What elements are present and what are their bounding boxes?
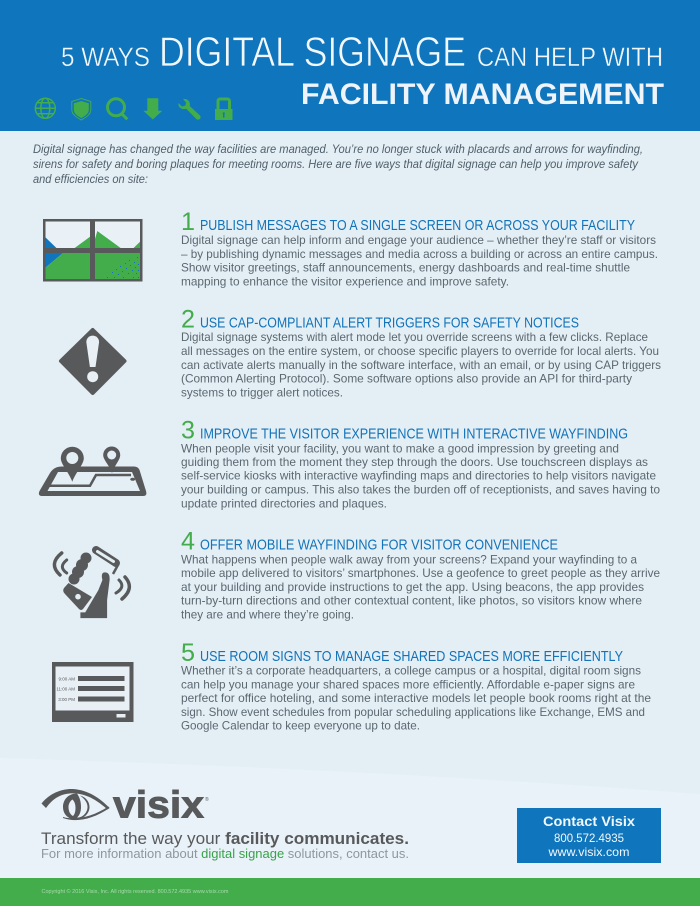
- registered mark: ®: [205, 796, 209, 803]
- body 3: your building or campus. This also takes the burden off of receptionists, and saves having to: [181, 482, 660, 496]
- icon: room sign schedule: 3:00 PM: [58, 697, 75, 702]
- body 4: [181, 552, 660, 621]
- title line 2: FACILITY MANAGEMENT: [301, 78, 664, 111]
- body 2: can activate alerts manually in the software interface, with an email, or by using CAP triggers: [181, 358, 661, 372]
- body 5: [181, 664, 651, 733]
- icon: phone in hand with signal waves: [54, 550, 129, 618]
- visix logo: [42, 784, 209, 826]
- header icons: [35, 98, 232, 120]
- logo eye: [42, 789, 110, 820]
- title line 1: DIGITAL SIGNAGE: [159, 28, 466, 75]
- intro text: and efficiencies on site:: [33, 172, 148, 186]
- copyright: Copyright © 2016 Visix, Inc. All rights reserved. 800.572.4935 www.visix.com: [42, 888, 229, 895]
- body 1: Digital signage can help inform and engage your audience – whether they’re staff or visitors: [181, 233, 656, 247]
- heading 5: USE ROOM SIGNS TO MANAGE SHARED SPACES MORE EFFICIENTLY: [200, 649, 623, 665]
- title line 1: CAN HELP WITH: [477, 42, 663, 72]
- body 5: sign. Show event schedules from popular scheduling applications like Exchange, EMS and: [181, 705, 645, 719]
- body 3: update printed directories and plaques.: [181, 496, 387, 510]
- body 1: mapping to enhance the visitor experience and improve safety.: [181, 274, 509, 288]
- icon: magnifier: [108, 99, 127, 119]
- icon: padlock: [215, 99, 232, 120]
- icon: room sign schedule: 9:00 AM: [58, 676, 75, 682]
- icon: map with pins: [39, 446, 146, 496]
- header band: [0, 0, 700, 131]
- number 5: 5: [181, 639, 195, 667]
- body 4: turn-by-turn directions and other contextual content, like photos, so visitors know where: [181, 594, 642, 608]
- tagline: Transform the way your facility communicates.: [41, 830, 409, 848]
- number 4: 4: [181, 527, 195, 555]
- body 4: at your building and provide instructions to get the app. Using beacons, the app provides: [181, 580, 644, 594]
- number 1: 1: [181, 208, 195, 236]
- icon: room sign schedule: 11:00 AM: [56, 686, 75, 692]
- body 5: perfect for office hoteling, and some interactive models let people book rooms right at the: [181, 691, 651, 705]
- logo wordmark: visix: [113, 784, 204, 826]
- heading 4: OFFER MOBILE WAYFINDING FOR VISITOR CONVENIENCE: [200, 537, 558, 553]
- footer panel: [0, 758, 700, 880]
- panel: section 4: [54, 527, 660, 621]
- contact box: www.visix.com: [547, 845, 630, 859]
- body 5: Whether it’s a corporate headquarters, a college campus or a hospital, digital room signs: [181, 664, 641, 678]
- heading 3: IMPROVE THE VISITOR EXPERIENCE WITH INTERACTIVE WAYFINDING: [200, 426, 628, 442]
- icon: shield: [72, 98, 91, 120]
- body 4: What happens when people walk away from your screens? Expand your wayfinding to a: [181, 552, 637, 566]
- icon: digital screen window: [43, 219, 142, 282]
- icon: down arrow: [143, 98, 162, 120]
- number 2: 2: [181, 305, 195, 333]
- heading 1: PUBLISH MESSAGES TO A SINGLE SCREEN OR ACROSS YOUR FACILITY: [200, 218, 635, 234]
- contact box: 800.572.4935: [554, 831, 624, 845]
- body 3: When people visit your facility, you want to make a good impression by greeting and: [181, 441, 619, 455]
- icon: alert diamond: [61, 330, 124, 393]
- title line 1: [61, 28, 663, 75]
- body 3: guiding them from the moment they step through the doors. Use touchscreen displays as: [181, 455, 648, 469]
- panel: section 3: [39, 416, 660, 510]
- body 3: self-service kiosks with interactive wayfinding maps and directories to help visitors navigate: [181, 469, 656, 483]
- contact prompt: For more information about digital signage solutions, contact us.: [41, 847, 409, 861]
- heading 2: USE CAP-COMPLIANT ALERT TRIGGERS FOR SAFETY NOTICES: [200, 315, 579, 331]
- panel: section 5: [52, 639, 651, 733]
- body 5: can help you manage your shared spaces more efficiently. Affordable e-paper signs are: [181, 677, 635, 691]
- panel: section 2: [61, 305, 661, 400]
- icon: room sign schedule: [52, 662, 134, 722]
- body 2: Digital signage systems with alert mode let you override screens with a few clicks. Replace: [181, 330, 648, 344]
- contact box: Contact Visix: [543, 813, 635, 829]
- body 2: (Common Alerting Protocol). Some software options also provide an API for third-party: [181, 372, 632, 386]
- body 1: Show visitor greetings, staff announcements, energy dashboards and real-time shuttle: [181, 261, 630, 275]
- intro text: Digital signage has changed the way facilities are managed. You’re no longer stuck with placards and arrows for wayfinding,: [33, 142, 643, 156]
- body 2: all messages on the entire system, or choose specific players to override for local alerts. You: [181, 344, 659, 358]
- body 3: [181, 441, 660, 510]
- icon: globe: [35, 98, 55, 118]
- green footer bar: [0, 878, 700, 906]
- icon: wrench: [178, 99, 201, 120]
- intro text: [33, 142, 643, 186]
- number 3: 3: [181, 416, 195, 444]
- body 5: Google Calendar to keep everyone up to date.: [181, 719, 420, 733]
- body 2: systems to trigger alert notices.: [181, 386, 343, 400]
- body 4: they are and where they’re going.: [181, 607, 354, 621]
- contact box: [517, 808, 661, 863]
- body 2: [181, 330, 661, 400]
- body 1: – by publishing dynamic messages and media across a building or across an entire campus.: [181, 247, 658, 261]
- title line 1: 5 WAYS: [61, 42, 150, 72]
- body 4: mobile app delivered to visitors’ smartphones. Use a geofence to greet people as they arrive: [181, 566, 660, 580]
- body 1: [181, 233, 658, 288]
- intro text: sirens for safety and boring plaques for meeting rooms. Here are five ways that digital signage can help you improve safety: [33, 157, 639, 171]
- panel: section 1: [43, 208, 658, 288]
